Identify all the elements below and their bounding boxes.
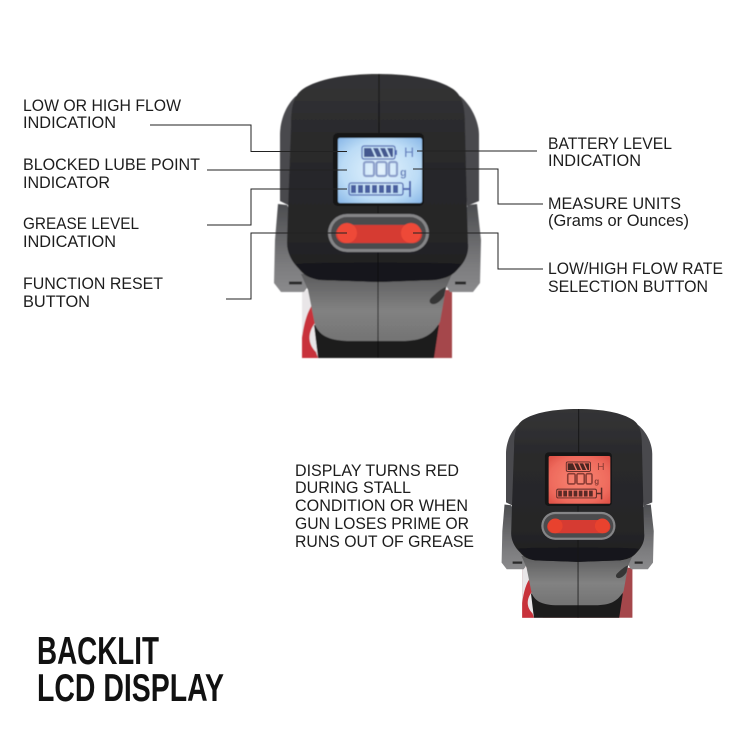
gray upper side shell: [280, 96, 479, 206]
black handle: [531, 593, 623, 618]
label: grease level: GREASE LEVEL: [23, 215, 139, 233]
red display note: DURING STALL: [295, 479, 411, 497]
neck screw recess: [616, 566, 628, 578]
label: battery level: BATTERY LEVEL: [548, 135, 672, 153]
label: grease level: INDICATION: [23, 233, 116, 251]
product photo: gun with red display: [502, 409, 654, 618]
label: blocked lube point: BLOCKED LUBE POINT: [23, 156, 200, 174]
gray neck: [301, 274, 452, 341]
button pill: red-display gun: [541, 512, 616, 540]
lcd bezel: [333, 133, 424, 206]
product photo: gun with blue backlit display: [274, 74, 481, 358]
flow letter: H: [597, 462, 605, 473]
red display note: DISPLAY TURNS RED: [295, 462, 459, 480]
dark lower band of housing: [518, 548, 639, 562]
gray neck: [521, 556, 632, 605]
red housing behind handle: [302, 290, 452, 358]
lcd screen: blue: [338, 138, 422, 203]
gray upper side shell: [506, 425, 652, 506]
centre seam: [577, 409, 580, 618]
black housing: [511, 409, 644, 562]
black housing: [287, 74, 468, 282]
flare screw slots: [513, 561, 643, 564]
red housing behind handle: [522, 568, 632, 618]
battery icon: [566, 462, 591, 471]
centre seam: [378, 74, 379, 358]
label: measure units: (Grams or Ounces): [548, 212, 689, 230]
title: BACKLIT: [37, 630, 159, 673]
dark lower band of housing: [296, 262, 461, 282]
digit readout: [364, 162, 397, 176]
lcd screen: red: [549, 456, 610, 504]
button pill: blue-display gun: [328, 214, 429, 252]
label: flow rate button: SELECTION BUTTON: [548, 278, 708, 296]
label: blocked lube point: INDICATOR: [23, 174, 110, 192]
gray side flares: [274, 204, 481, 292]
label: function reset: BUTTON: [23, 293, 90, 311]
red display note: RUNS OUT OF GREASE: [295, 533, 474, 551]
digit readout: [568, 474, 592, 484]
flow letter: H: [404, 144, 414, 160]
label: measure units: MEASURE UNITS: [548, 195, 681, 213]
label: flow rate button: LOW/HIGH FLOW RATE: [548, 260, 723, 278]
label: function reset: FUNCTION RESET: [23, 275, 163, 293]
red display note: CONDITION OR WHEN: [295, 497, 468, 515]
unit letter: g: [400, 167, 407, 179]
lcd bezel: [545, 452, 612, 506]
label: low or high flow: LOW OR HIGH FLOW: [23, 97, 181, 115]
title: LCD DISPLAY: [37, 667, 224, 710]
gray side flares: [502, 505, 654, 569]
label: battery level: INDICATION: [548, 152, 641, 170]
neck screw recess: [430, 287, 446, 304]
battery icon: [362, 146, 397, 159]
grease level gauge: [557, 488, 602, 499]
leader lines: [150, 125, 543, 299]
unit letter: g: [594, 477, 599, 486]
red display note: GUN LOSES PRIME OR: [295, 515, 469, 533]
black handle: [314, 325, 439, 358]
grease level gauge: [349, 181, 410, 197]
label: low or high flow: INDICATION: [23, 114, 116, 132]
flare screw slots: [289, 282, 466, 284]
